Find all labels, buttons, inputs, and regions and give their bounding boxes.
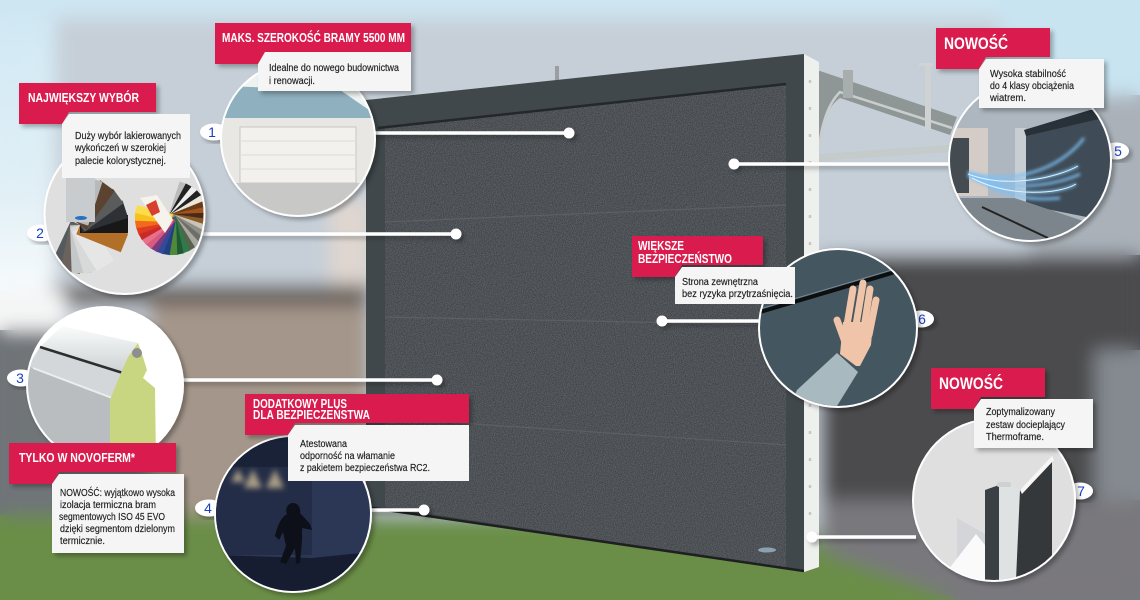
heading label 4: DODATKOWY PLUS [253,396,347,411]
callout 4: burglary protection [195,394,469,593]
text box 4: odporność na włamanie [300,451,395,462]
heading label 1 [215,23,411,64]
text box 5: wiatrem. [989,93,1026,104]
text box 2: palecie kolorystycznej. [75,156,166,167]
heading label 5 [936,28,1050,69]
heading label 7: NOWOŚĆ [939,374,1003,393]
heading label 3: TYLKO W NOVOFERM* [19,450,136,465]
callout 3: thermal insulation [7,306,184,553]
number badge 1 [200,124,228,140]
number badge 4: 4 [204,500,212,516]
text box 2: Duży wybór lakierowanych [75,131,181,142]
photo: white garage door [220,61,376,217]
photo: hand on door panel [758,248,918,408]
white side rail [804,54,819,572]
text box 7: zestaw docieplający [986,420,1065,431]
text box 3 [52,474,184,553]
number badge 5: 5 [1114,143,1122,159]
callout 1: maximum width [200,23,411,217]
number badge 2: 2 [36,225,44,241]
callout 6: greater safety [632,236,934,408]
number badge 7 [1067,482,1093,500]
text box 1: Idealne do nowego budownictwa [269,63,399,74]
text box 7: Thermoframe. [986,432,1044,443]
text box 3: dzięki segmentom dzielonym [60,524,175,535]
heading label 6: BEZPIECZEŃSTWO [638,251,732,266]
text box 5: do 4 klasy obciążenia [990,81,1074,92]
number badge 3 [7,370,35,386]
heading label 3 [9,443,176,484]
callout 5: wind load [936,28,1129,242]
number badge 7: 7 [1077,483,1085,499]
text box 2: wykończeń w szerokiej [74,143,166,154]
text box 4: Atestowana [300,439,347,450]
heading label 6: WIĘKSZE [638,238,684,253]
text box 1 [258,52,411,91]
text box 1: i renowacji. [269,76,315,87]
garage door [366,54,804,572]
photo: panel cross-section [26,306,190,443]
heading label 2: NAJWIĘKSZY WYBÓR [28,90,139,105]
text box 7: Zoptymalizowany [986,407,1055,418]
text box 6: Strona zewnętrzna [682,277,758,288]
heading label 4: DLA BEZPIECZEŃSTWA [253,407,370,422]
photo: colour swatch fans [44,162,211,300]
text box 3: izolacja termiczna bram [60,500,156,511]
number badge 5 [1103,142,1129,160]
connector lines [180,128,952,542]
overhead track system [555,63,957,161]
number badge 2 [27,224,55,242]
callout 7: Thermoframe [912,368,1093,582]
number badge 6 [908,310,934,328]
photo: burglar at night [214,435,372,593]
photo: Thermoframe profile [912,418,1076,582]
heading label 5: NOWOŚĆ [944,34,1008,53]
number badge 1: 1 [208,124,216,140]
text box 3: NOWOŚĆ: wyjątkowo wysoka [60,486,175,499]
text box 2 [62,114,190,178]
photo: garage with wind [948,78,1112,242]
text box 4 [288,425,469,481]
heading label 2 [19,83,156,124]
callout 2: colour choice [19,83,209,295]
text box 5: Wysoka stabilność [990,69,1066,80]
heading label 4 [245,394,469,435]
number badge 6: 6 [918,311,926,327]
text box 3: termicznie. [60,536,105,547]
text box 4: z pakietem bezpieczeństwa RC2. [300,463,430,474]
text box 5 [979,59,1104,108]
fan one [51,176,128,274]
heading label 6 [632,236,763,277]
text box 7 [974,399,1093,448]
text box 6 [675,267,795,304]
number badge 3: 3 [16,370,24,386]
number badge 4 [195,500,223,516]
heading label 1: MAKS. SZEROKOŚĆ BRAMY 5500 MM [222,30,405,45]
text box 3: segmentowych ISO 45 EVO [59,512,165,523]
fan two [135,183,209,255]
heading label 7 [931,368,1045,409]
text box 6: bez ryzyka przytrzaśnięcia. [682,289,793,300]
